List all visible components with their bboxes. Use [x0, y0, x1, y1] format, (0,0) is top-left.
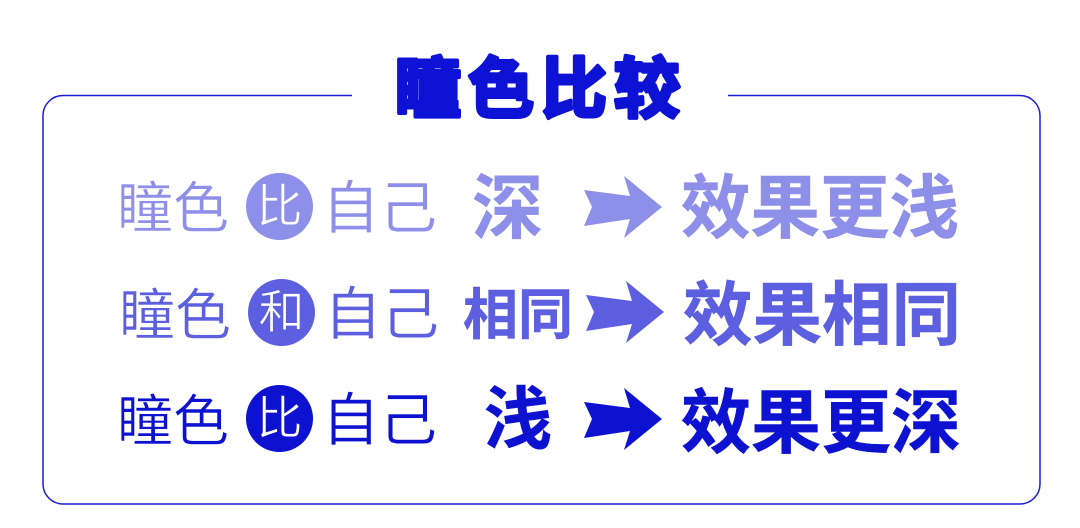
badge: compare: 比	[256, 180, 302, 232]
badge: and: 和	[258, 286, 304, 338]
result: same effect: 效果相同	[683, 276, 961, 354]
row 2: same as self	[119, 276, 961, 354]
label: self: 自己	[322, 177, 437, 241]
label: self: 自己	[324, 283, 439, 347]
title: 瞳色比较	[395, 52, 687, 126]
result: effect lighter: 效果更浅	[681, 169, 959, 247]
word: dark: 深	[472, 170, 543, 249]
badge: compare: 比	[256, 392, 302, 444]
arrow	[584, 176, 662, 238]
badge: and	[248, 279, 315, 346]
label: pupil colour: 瞳色	[119, 284, 231, 347]
label: pupil colour: 瞳色	[117, 177, 229, 240]
label: pupil colour: 瞳色	[117, 390, 229, 453]
arrow	[586, 281, 664, 343]
row 3: lighter than self	[117, 382, 961, 462]
arrow	[584, 388, 662, 450]
badge: compare	[246, 385, 313, 452]
word: light: 浅	[484, 382, 552, 458]
badge: compare	[246, 173, 313, 240]
result: effect darker: 效果更深	[681, 384, 961, 462]
row 1: darker than self	[117, 169, 959, 249]
word: same: 相同	[463, 284, 573, 346]
label: self: 自己	[322, 389, 437, 453]
